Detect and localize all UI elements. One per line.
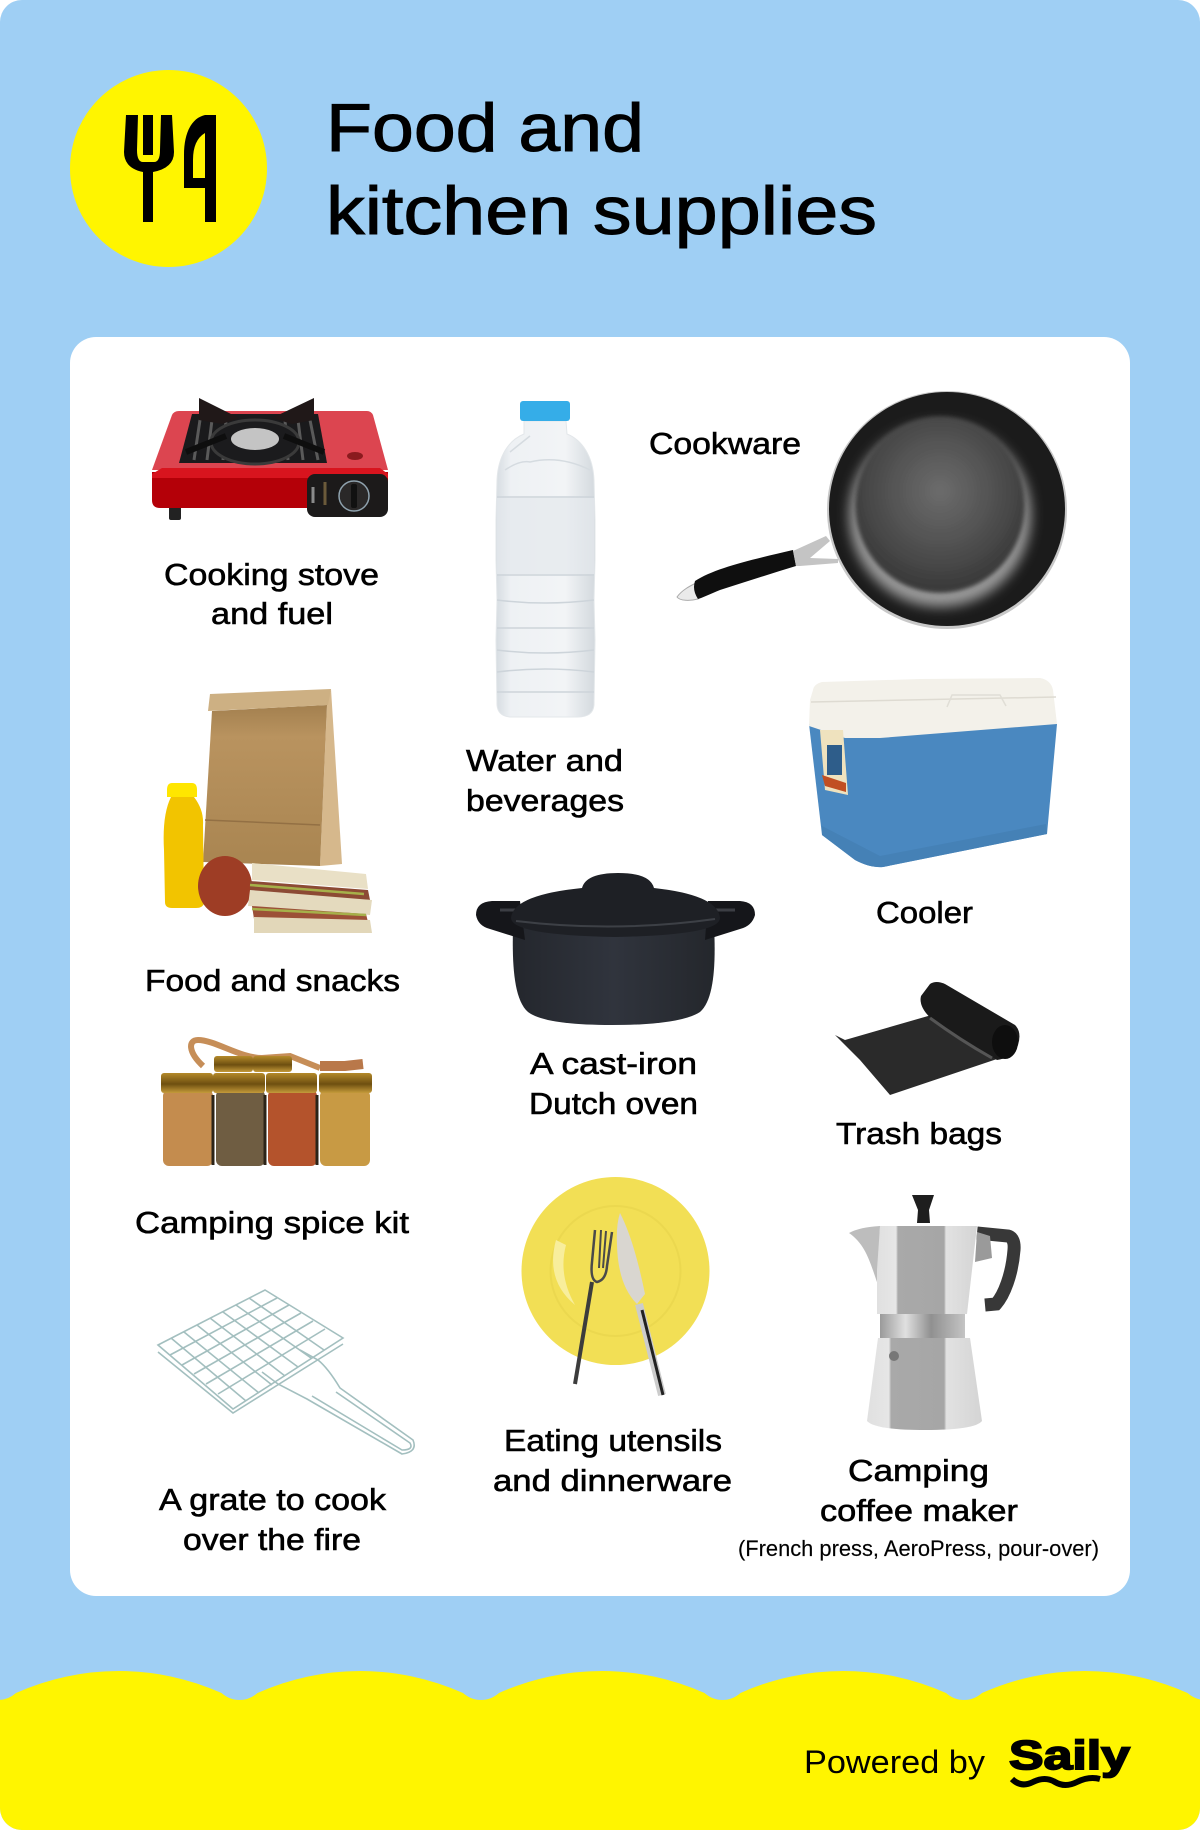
logo: Saily: Saily [1009,1732,1130,1778]
item: cooking stove [152,398,388,631]
title: kitchen supplies [326,173,877,249]
label: Camping spice kit [135,1205,409,1240]
item: coffee maker [738,1195,1099,1561]
label: A grate to cook [159,1482,387,1517]
item: water bottle [466,401,624,818]
stove image [152,398,388,520]
label: Trash bags [836,1116,1002,1151]
label: coffee maker [820,1493,1018,1528]
label: and dinnerware [493,1463,732,1498]
cooler image [809,678,1057,867]
label: beverages [466,783,624,818]
label: Water and [466,743,623,778]
label [738,1453,1099,1561]
bottle image [496,401,595,717]
plate image [522,1177,710,1395]
title [326,90,877,249]
icon: fork and knife in yellow circle [70,70,267,267]
label [466,743,624,818]
trash bag roll image [835,982,1019,1095]
label [493,1423,732,1498]
label: Cooking stove [164,557,379,592]
label: Eating utensils [504,1423,722,1458]
item: camping spice kit [135,1040,409,1240]
label [164,557,379,631]
frying pan image [677,391,1067,629]
logo: Saily [1009,1732,1130,1785]
label: and fuel [211,596,333,631]
panel: white item board [70,337,1130,1596]
footer: powered by: Powered by [804,1744,985,1780]
label [159,1482,387,1557]
label: (French press, AeroPress, pour-over) [738,1536,1099,1561]
wire grate image [158,1290,414,1454]
label: Dutch oven [529,1086,698,1121]
item: food and snacks [145,689,400,998]
label: Camping [848,1453,989,1488]
item: grate [158,1290,414,1454]
item: trash bags [835,982,1019,1151]
label: Cooler [876,895,973,930]
title: Food and [326,90,644,166]
label: Cookware [649,426,801,461]
item: plate and utensils [493,1177,732,1498]
pot image [476,873,755,1025]
food image [164,689,372,933]
item: cast-iron Dutch oven [476,873,755,1121]
label: Food and snacks [145,963,400,998]
label: over the fire [183,1522,361,1557]
footer wave [0,1671,1200,1830]
spice jars image [161,1040,372,1166]
moka pot image [849,1195,1014,1430]
item: cooler [809,678,1057,930]
label [529,1046,698,1121]
item: cookware [649,391,1067,629]
label: A cast-iron [530,1046,697,1081]
